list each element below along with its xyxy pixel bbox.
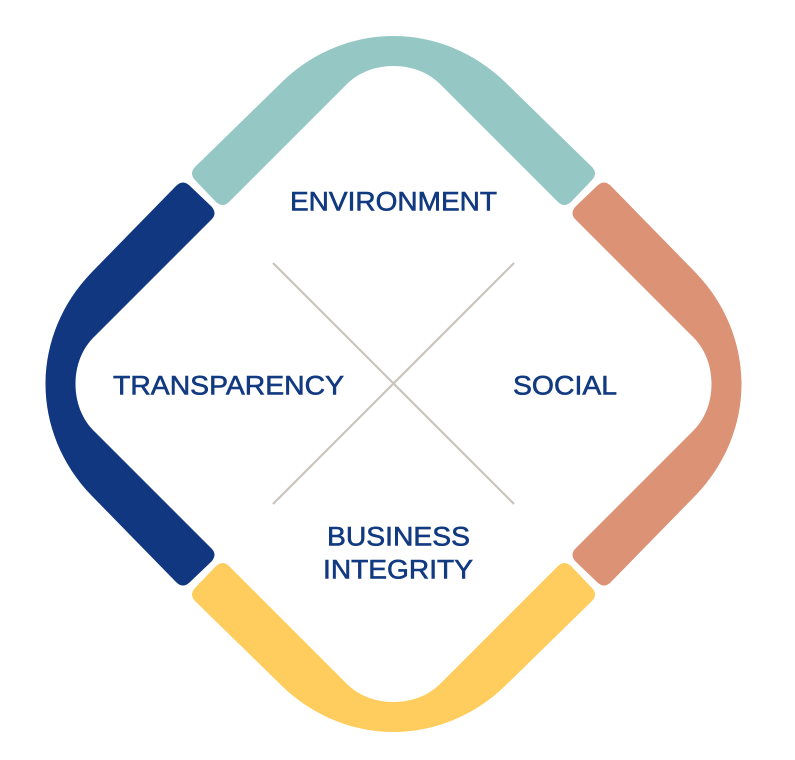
center cross bbox=[273, 263, 514, 504]
segment: environment (teal) bbox=[192, 36, 595, 205]
label: business integrity bbox=[323, 522, 473, 584]
label: business integrity: BUSINESS bbox=[327, 522, 470, 552]
label: environment: ENVIRONMENT bbox=[290, 186, 497, 216]
label: business integrity: INTEGRITY bbox=[323, 554, 473, 584]
segment: transparency (navy) bbox=[46, 182, 214, 586]
segment: business integrity (yellow) bbox=[192, 563, 595, 732]
label: social: SOCIAL bbox=[513, 370, 617, 400]
segment: social (salmon) bbox=[572, 182, 742, 586]
label: transparency: TRANSPARENCY bbox=[113, 370, 344, 400]
